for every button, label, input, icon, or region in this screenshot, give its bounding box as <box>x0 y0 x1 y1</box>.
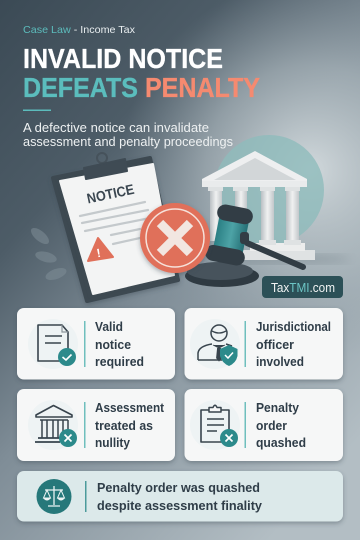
card text <box>256 401 306 450</box>
subtitle: assessment and penalty proceedings <box>23 135 233 149</box>
card: jurisdictional officer involved <box>184 308 343 380</box>
card text: Assessment <box>95 401 165 415</box>
text lines <box>80 202 150 244</box>
card text: order <box>256 419 287 433</box>
card text: treated as <box>95 419 153 433</box>
icon: scales of justice <box>36 479 72 514</box>
card text <box>95 401 165 450</box>
conclusion banner <box>17 471 343 522</box>
illustration: clipboard with notice <box>53 153 178 301</box>
brand badge: TaxTMI.com <box>271 281 335 295</box>
icon: document with check <box>28 319 78 369</box>
banner text: despite assessment finality <box>97 498 263 513</box>
clipboard clip <box>84 153 127 179</box>
subtitle <box>23 121 233 149</box>
card text: officer <box>256 338 294 352</box>
banner text <box>97 480 263 513</box>
warning triangle: ! <box>95 246 102 260</box>
card text: Jurisdictional <box>256 320 331 334</box>
card: penalty order quashed <box>184 389 343 461</box>
card text <box>95 320 144 369</box>
title line 1: INVALID NOTICE <box>23 43 223 74</box>
card text: Penalty <box>256 401 299 415</box>
icon: officer with shield <box>190 319 240 369</box>
illustration: courthouse <box>202 151 350 264</box>
card text: Valid <box>95 320 123 334</box>
card text: nullity <box>95 436 130 450</box>
icon: court building with cross <box>28 400 78 450</box>
banner text: Penalty order was quashed <box>97 480 260 495</box>
card: valid notice required <box>17 308 175 380</box>
paper sheet <box>60 164 174 294</box>
icon: clipboard with cross <box>190 400 240 450</box>
card text: notice <box>95 338 131 352</box>
subtitle: A defective notice can invalidate <box>23 121 209 135</box>
card: assessment treated as nullity <box>17 389 175 461</box>
illustration: gavel <box>185 202 303 287</box>
eyebrow: category: Case Law - Income Tax <box>23 24 136 36</box>
warning triangle <box>88 238 113 261</box>
card text: required <box>95 355 144 369</box>
accent rule <box>23 110 51 111</box>
card text: involved <box>256 355 304 369</box>
notice heading: NOTICE <box>85 181 136 206</box>
title line 2: DEFEATS PENALTY <box>23 72 260 103</box>
card text <box>256 320 331 369</box>
icon: red cross stamp <box>140 203 210 273</box>
card text: quashed <box>256 436 306 450</box>
brand badge <box>262 276 343 298</box>
decorative leaves <box>28 225 68 282</box>
teal circle behind courthouse <box>214 135 324 245</box>
